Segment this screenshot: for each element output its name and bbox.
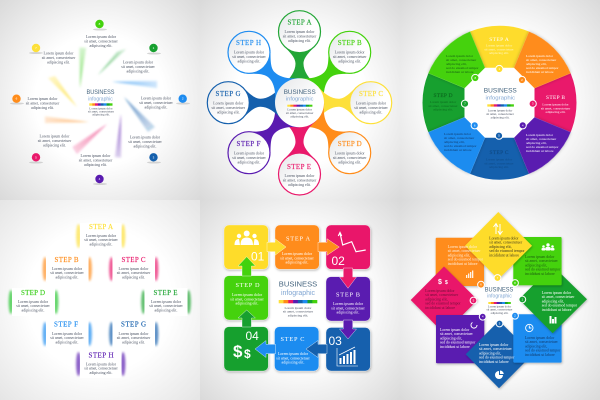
step labels and text: STEP F (236, 140, 261, 148)
sector labels and text: sed do eiusmod tempor (526, 145, 559, 149)
big numbers: 04 (246, 329, 259, 343)
number dots: 6 (16, 97, 18, 101)
sector labels and text: adipiscing elit. (489, 165, 509, 169)
icon: dollar signs (438, 279, 448, 286)
sector labels and text: sit amet, consectetuer (526, 58, 557, 63)
block texts: adipiscing elit, (489, 245, 512, 250)
number dots: 8 (99, 22, 101, 26)
card text: adipiscing elit. (22, 308, 44, 312)
center title: sit amet, consectetuer (486, 112, 515, 117)
block texts: Lorem ipsum dolor (448, 245, 478, 249)
block texts: adipiscing elit, (479, 351, 501, 356)
step labels and text: sit amet, consectetuer (211, 106, 246, 111)
text blocks: Lorem ipsum dolor (80, 154, 111, 158)
center number digits: 4 (482, 315, 484, 319)
center title: infographic (281, 290, 315, 297)
center number digits: 7 (497, 276, 499, 280)
center title: adipiscing elit. (92, 112, 110, 116)
numbers: 4 (522, 123, 524, 127)
center title (484, 87, 517, 120)
block texts: sed do eiusmod tempor (448, 258, 484, 262)
block texts: adipiscing elit, (440, 336, 462, 341)
block texts: incididunt ut labore (448, 262, 478, 266)
step labels and text: sit amet, consectetuer (280, 256, 314, 261)
icon: dollar signs: $ (244, 347, 251, 361)
rays (45, 48, 157, 158)
orange square (436, 238, 484, 286)
icon: dollar signs: $ (438, 279, 442, 286)
number dots: 7 (35, 46, 37, 50)
sector labels and text: sit amet, consectetuer (484, 47, 515, 52)
pink diamond (411, 266, 478, 334)
panel: petal circles infographic (207, 11, 392, 195)
step circles (207, 11, 392, 195)
text blocks (26, 35, 173, 167)
center title: sit amet, consectetuer (487, 308, 512, 313)
sector labels and text: Lorem ipsum dolor (486, 158, 513, 162)
numbers: 5 (498, 134, 500, 138)
card text: STEP B (54, 256, 79, 264)
big numbers: 03 (328, 334, 342, 348)
center title (279, 280, 317, 318)
step labels and text: adipiscing elit. (286, 261, 308, 265)
text blocks: adipiscing elit. (31, 106, 54, 110)
center number digits: 1 (521, 298, 523, 302)
sector labels and text: sit amet, consectetuer (541, 106, 571, 111)
numbers: 1 (498, 67, 500, 71)
numbers: 3 (532, 102, 534, 106)
numbers: 8 (474, 76, 476, 80)
icon: bar chart (337, 347, 358, 366)
sector labels and text: adipiscing elit. (489, 51, 509, 55)
text blocks: adipiscing elit. (145, 106, 167, 110)
icon: refresh (471, 322, 477, 328)
step labels and text: STEP A (288, 18, 312, 26)
squares (224, 225, 370, 371)
icon: people (234, 230, 259, 245)
numbers: 2 (521, 78, 523, 82)
arrows (238, 239, 356, 358)
yellow diamond (465, 212, 532, 279)
block texts: sit amet, consectetuer (489, 241, 523, 246)
text blocks: Lorem ipsum dolor (141, 96, 172, 100)
center title (485, 287, 513, 315)
text blocks: sit amet, consectetuer (42, 56, 76, 61)
center title: adipiscing elit. (491, 311, 509, 315)
number circles (461, 65, 536, 139)
sector labels and text: STEP C (490, 150, 509, 156)
center title (86, 89, 114, 116)
sector labels and text: Lorem ipsum dolor (486, 44, 513, 48)
step labels and text: Lorem ipsum dolor (333, 302, 364, 306)
number dots: 4 (99, 177, 101, 181)
dark green diamond (519, 266, 587, 333)
center title: Lorem ipsum dolor (284, 306, 312, 310)
block texts: sit amet, consectetuer (448, 249, 481, 254)
step labels and text: adipiscing elit. (360, 110, 382, 114)
big numbers: 02 (332, 254, 345, 268)
card text: adipiscing elit. (155, 308, 177, 312)
step labels and text: sit amet, consectetuer (283, 34, 317, 39)
sector labels and text: Lorem ipsum dolor (430, 100, 457, 104)
dark blue diamond (466, 321, 533, 388)
text blocks: Lorem ipsum dolor (27, 97, 58, 101)
step labels and text: Lorem ipsum dolor (278, 352, 309, 356)
center title: BUSINESS (279, 280, 317, 289)
text blocks: adipiscing elit. (47, 61, 70, 65)
icon: arrows up down (494, 224, 502, 234)
step labels and text: sit amet, consectetuer (232, 156, 266, 161)
step labels and text: STEP E (287, 163, 311, 171)
card text: Lorem ipsum dolor (118, 332, 149, 336)
block texts: adipiscing elit, (542, 299, 564, 304)
card text: adipiscing elit. (122, 275, 145, 279)
card text: sit amet, consectetuer (50, 271, 84, 276)
center title: Lorem ipsum dolor (89, 106, 113, 110)
center number digits: 8 (514, 281, 516, 285)
sector labels and text: adipiscing elit, (446, 62, 467, 67)
step labels and text: Lorem ipsum dolor (335, 50, 365, 54)
block texts: incididunt ut labore (525, 272, 555, 276)
center title: BUSINESS (86, 89, 114, 96)
sector labels and text: STEP A (489, 37, 509, 43)
center title: sit amet, consectetuer (88, 110, 114, 114)
sector labels and text: Lorem ipsum dolor (542, 102, 569, 106)
block texts: incididunt ut labore (525, 353, 555, 357)
step labels and text: STEP D (236, 282, 260, 289)
blue square (513, 314, 562, 363)
step labels and text: adipiscing elit. (338, 59, 361, 63)
center title: adipiscing elit. (491, 116, 510, 120)
text blocks: Lorem ipsum dolor (39, 134, 70, 138)
text blocks: adipiscing elit. (90, 44, 112, 48)
text blocks: sit amet, consectetuer (84, 40, 118, 45)
sector labels and text: incididunt ut labore (446, 70, 474, 74)
card text: STEP F (54, 320, 78, 328)
block texts: incididunt ut labore (425, 306, 455, 310)
text blocks: sit amet, consectetuer (26, 102, 60, 107)
number dots: 5 (35, 155, 37, 159)
number dots: 1 (153, 46, 155, 50)
block texts: Lorem ipsum dolor (425, 289, 455, 293)
card text: STEP E (154, 289, 178, 297)
card text: Lorem ipsum dolor (52, 267, 83, 271)
text blocks: adipiscing elit. (84, 163, 107, 167)
purple square (436, 315, 484, 363)
center title: Lorem ipsum dolor (287, 108, 313, 112)
step labels and text: sit amet, consectetuer (333, 156, 367, 161)
white cards (12, 223, 188, 378)
block texts: adipiscing elit, (525, 263, 547, 268)
center title (284, 89, 316, 118)
sector labels and text: sed do eiusmod tempor (444, 144, 477, 148)
card text: STEP H (88, 352, 114, 360)
card text: sit amet, consectetuer (84, 238, 118, 243)
step labels and text: STEP A (286, 236, 310, 242)
center numbers (470, 275, 526, 327)
sector labels and text: sit amet, consectetuer (428, 104, 459, 109)
card text: sit amet, consectetuer (117, 271, 151, 276)
sector labels and text: incididunt ut labore (526, 70, 554, 74)
card text: adipiscing elit. (90, 242, 112, 246)
center title: sit amet, consectetuer (286, 111, 314, 116)
sector labels and text: sed do eiusmod tempor (526, 66, 559, 70)
step labels and text: sit amet, consectetuer (283, 178, 317, 183)
icon: rising line (338, 232, 366, 252)
center title: BUSINESS (484, 87, 517, 94)
step labels and text: STEP B (336, 292, 360, 298)
text blocks: adipiscing elit. (134, 145, 156, 149)
sector labels and text: Lorem ipsum dolor (526, 133, 554, 137)
sector labels and text: adipiscing elit, (526, 62, 547, 67)
step labels and text: Lorem ipsum dolor (234, 50, 265, 54)
icon: dollar signs (233, 342, 251, 361)
step labels and text: Lorem ipsum dolor (356, 102, 387, 106)
sector labels and text: sit amet, consectetuer (444, 136, 475, 141)
block texts: adipiscing elit, (425, 297, 448, 302)
step labels and text: sit amet, consectetuer (232, 55, 266, 60)
card text (16, 223, 183, 375)
step labels and text: sit amet, consectetuer (230, 297, 264, 302)
card text: Lorem ipsum dolor (118, 267, 149, 271)
step labels and text: Lorem ipsum dolor (282, 252, 313, 256)
sector labels and text: STEP B (546, 95, 565, 101)
number dots: 2 (182, 97, 184, 101)
block texts: incididunt ut labore (479, 360, 509, 364)
block texts: adipiscing elit, (448, 253, 470, 258)
text blocks: adipiscing elit. (43, 144, 66, 148)
panel: pinwheel squares infographic (411, 212, 587, 388)
step labels and text: STEP G (216, 90, 240, 98)
text blocks: Lorem ipsum dolor (123, 60, 154, 64)
center title: BUSINESS (284, 89, 316, 96)
step labels and text: STEP H (236, 39, 261, 47)
block texts: sed do eiusmod tempor (440, 341, 476, 345)
center title: adipiscing elit. (290, 114, 309, 118)
block texts: sit amet, consectetuer (425, 293, 459, 298)
sector labels and text (428, 37, 571, 169)
panel: blurred white cards infographic (9, 223, 191, 378)
block texts: sit amet, consectetuer (525, 259, 559, 264)
sector labels and text: Lorem ipsum dolor (446, 54, 474, 58)
step labels and text: STEP C (359, 90, 383, 98)
step labels and text: sit amet, consectetuer (331, 306, 365, 311)
block texts: sed do eiusmod tempor (489, 249, 525, 253)
step labels and text: adipiscing elit. (288, 183, 311, 187)
sector labels and text: adipiscing elit, (526, 141, 547, 146)
block texts: Lorem ipsum dolor (542, 291, 572, 295)
center title: sit amet, consectetuer (283, 310, 314, 315)
sector labels and text: sit amet, consectetuer (446, 58, 477, 63)
center number digits: 2 (514, 314, 516, 318)
center title: adipiscing elit. (288, 314, 308, 318)
icon: dollar signs: $ (233, 342, 243, 361)
text blocks: Lorem ipsum dolor (130, 136, 161, 140)
number dots (10, 20, 190, 185)
text blocks: sit amet, consectetuer (38, 139, 72, 144)
step labels and text: STEP C (280, 336, 304, 343)
card text: Lorem ipsum dolor (151, 300, 182, 304)
step labels and text: Lorem ipsum dolor (284, 174, 315, 178)
card text: Lorem ipsum dolor (18, 300, 49, 304)
block texts: sit amet, consectetuer (525, 340, 559, 345)
step labels and text: Lorem ipsum dolor (284, 30, 315, 34)
step labels and text: adipiscing elit. (238, 59, 260, 63)
card text: Lorem ipsum dolor (52, 332, 83, 336)
block texts: Lorem ipsum dolor (525, 336, 555, 340)
sector labels and text: Lorem ipsum dolor (526, 54, 554, 58)
step labels and text: Lorem ipsum dolor (213, 102, 244, 106)
big numbers: 01 (251, 250, 265, 264)
icon: mini chart (466, 270, 473, 278)
big numbers (246, 250, 345, 348)
step labels and text: adipiscing elit. (288, 39, 311, 43)
sector labels and text: sed do eiusmod tempor (446, 66, 479, 70)
panel: color wheel infographic (422, 26, 577, 180)
sector labels and text: adipiscing elit. (433, 108, 453, 112)
text blocks: sit amet, consectetuer (121, 65, 155, 70)
center title: infographic (486, 96, 515, 102)
block texts: incididunt ut labore (489, 253, 519, 257)
card text: sit amet, consectetuer (50, 336, 84, 341)
step labels and text: adipiscing elit. (338, 160, 361, 164)
numbers: 6 (474, 123, 476, 127)
block texts: Lorem ipsum dolor (525, 255, 555, 259)
card text: adipiscing elit. (56, 275, 78, 279)
block texts: Lorem ipsum dolor (479, 343, 509, 347)
center number digits: 3 (499, 322, 501, 326)
card text: adipiscing elit. (90, 371, 112, 375)
center number digits: 5 (473, 298, 475, 302)
block texts: sit amet, consectetuer (440, 332, 474, 337)
wheel sectors (422, 26, 577, 180)
card text: Lorem ipsum dolor (86, 362, 117, 366)
card text: sit amet, consectetuer (84, 367, 118, 372)
icon: pie chart (495, 370, 504, 379)
step labels and text: sit amet, consectetuer (276, 356, 310, 361)
card text: STEP D (21, 289, 45, 297)
text blocks: sit amet, consectetuer (139, 101, 173, 106)
sector labels and text: adipiscing elit. (546, 110, 566, 114)
numbers (464, 67, 534, 138)
step labels and text: adipiscing elit. (337, 311, 359, 315)
block texts: sit amet, consectetuer (479, 347, 513, 352)
connectors (242, 45, 358, 161)
card text: STEP C (122, 256, 146, 264)
step labels and text (211, 18, 388, 187)
sector labels and text: sit amet, consectetuer (526, 137, 557, 142)
block texts: sed do eiusmod tempor (525, 268, 561, 272)
block texts: sed do eiusmod tempor (425, 302, 461, 306)
icon: clock (526, 324, 533, 332)
card text: STEP A (89, 223, 113, 231)
card text: adipiscing elit. (122, 340, 145, 344)
step labels and text: adipiscing elit. (282, 361, 304, 365)
center number digits (473, 276, 523, 326)
center circle (275, 78, 324, 127)
panel: radial rays infographic (10, 20, 190, 185)
card text: STEP G (121, 320, 146, 328)
block texts: sed do eiusmod tempor (479, 356, 515, 360)
center title: Lorem ipsum dolor (488, 108, 513, 112)
step labels and text: Lorem ipsum dolor (232, 293, 263, 297)
step labels and text: adipiscing elit. (236, 302, 258, 306)
card text: adipiscing elit. (56, 340, 78, 344)
step labels and text: adipiscing elit. (217, 110, 240, 114)
number dots: 3 (153, 155, 155, 159)
step labels and text: Lorem ipsum dolor (234, 152, 265, 156)
icon: dollar signs: $ (445, 280, 448, 286)
sector labels and text: incididunt ut labore (526, 149, 554, 153)
text blocks: Lorem ipsum dolor (86, 35, 117, 39)
numbers: 7 (464, 102, 466, 106)
block texts: Lorem ipsum dolor (489, 236, 519, 240)
sector labels and text: Lorem ipsum dolor (444, 132, 472, 136)
block texts: sed do eiusmod tempor (525, 349, 561, 353)
sector labels and text: adipiscing elit, (444, 140, 465, 145)
block texts: Lorem ipsum dolor (440, 328, 470, 332)
glow strips (9, 224, 191, 376)
block texts: incididunt ut labore (440, 345, 470, 349)
block texts: sit amet, consectetuer (542, 295, 575, 300)
icon: bars (550, 316, 556, 324)
center title: infographic (487, 294, 512, 300)
icon: people (542, 243, 554, 250)
step labels and text (230, 236, 365, 365)
step labels and text: STEP D (338, 140, 362, 148)
step labels and text: STEP B (338, 39, 362, 47)
center title: Lorem ipsum dolor (488, 304, 511, 308)
card text: sit amet, consectetuer (117, 336, 151, 341)
sector labels and text: STEP D (434, 93, 453, 99)
center title: infographic (88, 96, 113, 102)
text blocks: adipiscing elit. (127, 70, 149, 74)
green square (513, 237, 562, 285)
panel: square flow infographic (224, 225, 370, 371)
card text: sit amet, consectetuer (16, 304, 50, 309)
card text: sit amet, consectetuer (149, 304, 183, 309)
text blocks: sit amet, consectetuer (128, 140, 162, 145)
step labels and text: sit amet, consectetuer (333, 55, 367, 60)
step labels and text: Lorem ipsum dolor (335, 152, 365, 156)
sector labels and text: sit amet, consectetuer (484, 161, 515, 166)
center title: infographic (286, 97, 314, 103)
step labels and text: sit amet, consectetuer (354, 106, 388, 111)
center number digits: 6 (480, 283, 482, 287)
block texts (425, 236, 578, 364)
card text: Lorem ipsum dolor (86, 234, 117, 238)
block texts: sed do eiusmod tempor (542, 304, 578, 308)
center title: BUSINESS (485, 287, 513, 294)
sector labels and text: incididunt ut labore (444, 148, 472, 152)
block texts: incididunt ut labore (542, 308, 572, 312)
text blocks: Lorem ipsum dolor (43, 52, 74, 56)
step labels and text: adipiscing elit. (238, 160, 260, 164)
text blocks: sit amet, consectetuer (79, 159, 113, 164)
block texts: adipiscing elit, (525, 344, 547, 349)
